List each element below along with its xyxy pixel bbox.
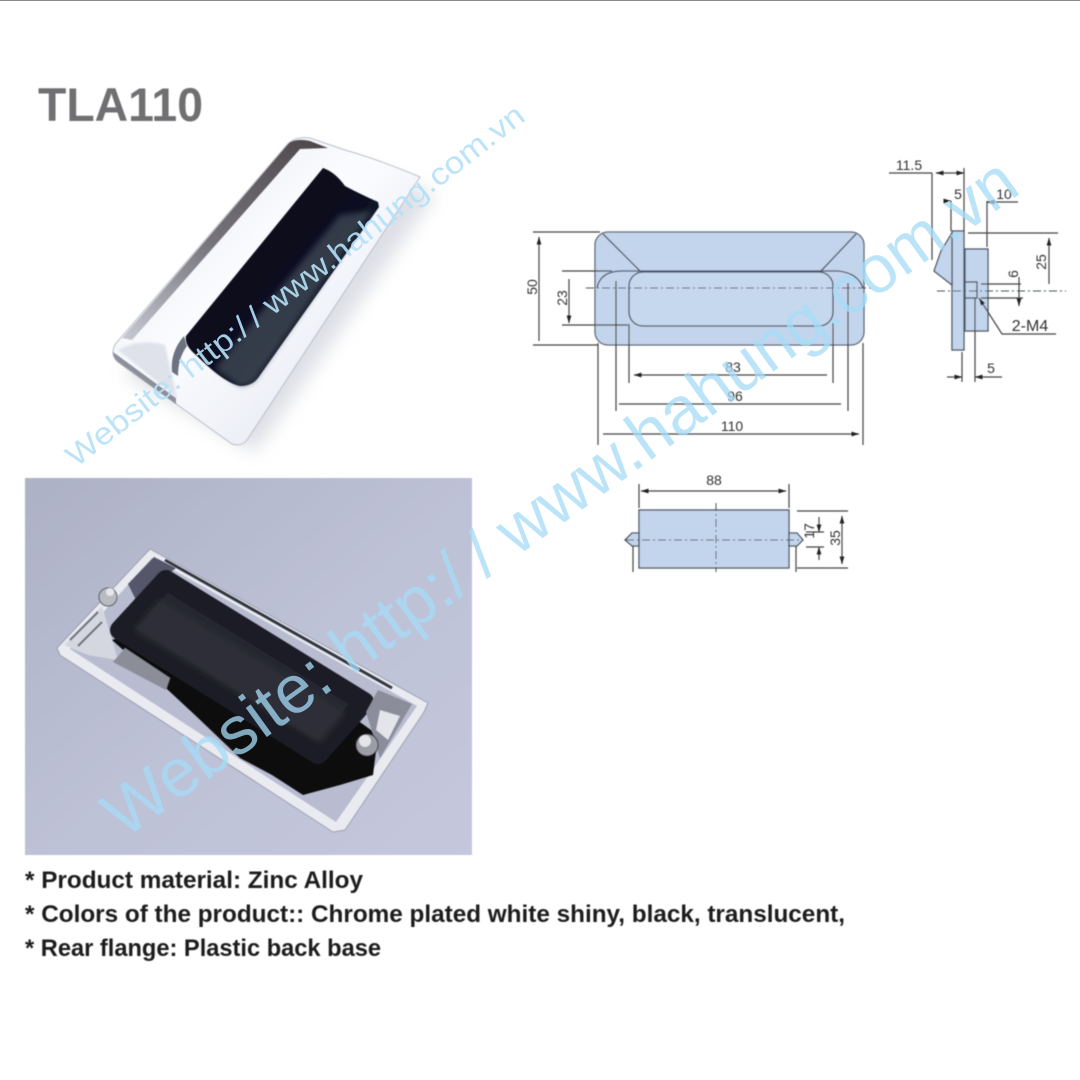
- specification text: [25, 867, 845, 962]
- watermark: small diagonal: Website: http:// www.hahung.com.vn: [59, 97, 531, 474]
- chrome flange: [57, 549, 428, 832]
- drawing: side view with dimensions: [889, 157, 1066, 382]
- drawing: bottom view with dimensions: [625, 472, 848, 572]
- drawing: side view with dimensions: 11.5: [896, 157, 922, 173]
- drawing: side view with dimensions: 25: [1033, 254, 1049, 270]
- drawing: front view with dimensions: 23: [554, 290, 570, 306]
- drawing: side view with dimensions: 10: [996, 186, 1012, 202]
- title: TLA110: [38, 78, 203, 131]
- black plastic base: [112, 580, 378, 795]
- photo: chrome handle front: [113, 138, 435, 452]
- drawing: bottom view with dimensions: 17: [801, 523, 817, 539]
- drawing: side view with dimensions: 2-M4: [1012, 318, 1048, 335]
- watermark: large diagonal: Website: http:// www.hahung.com.vn: [88, 142, 1031, 852]
- drawing: side view with dimensions: 5: [987, 360, 995, 376]
- drawing: bottom view with dimensions: 88: [706, 472, 722, 488]
- photo: back of handle on grey background: [25, 478, 472, 855]
- drawing: front view with dimensions: 50: [524, 279, 540, 295]
- drawing: side view with dimensions: 6: [1005, 270, 1021, 278]
- drawing: front view with dimensions: 83: [725, 359, 741, 375]
- screws: [99, 588, 117, 606]
- drawing: bottom view with dimensions: 35: [827, 530, 843, 546]
- specification text: * Product material: Zinc Alloy: [25, 867, 364, 894]
- specification text: * Colors of the product:: Chrome plated white shiny, black, translucent,: [25, 901, 845, 928]
- top border line: [0, 0, 1080, 1]
- metal corner reflection: [366, 690, 412, 758]
- specification text: * Rear flange: Plastic back base: [25, 935, 381, 962]
- drawing: front view with dimensions: [524, 232, 874, 445]
- drawing: front view with dimensions: 96: [727, 388, 743, 404]
- drawing: front view with dimensions: 110: [721, 418, 743, 434]
- drawing: side view with dimensions: 5: [954, 186, 962, 202]
